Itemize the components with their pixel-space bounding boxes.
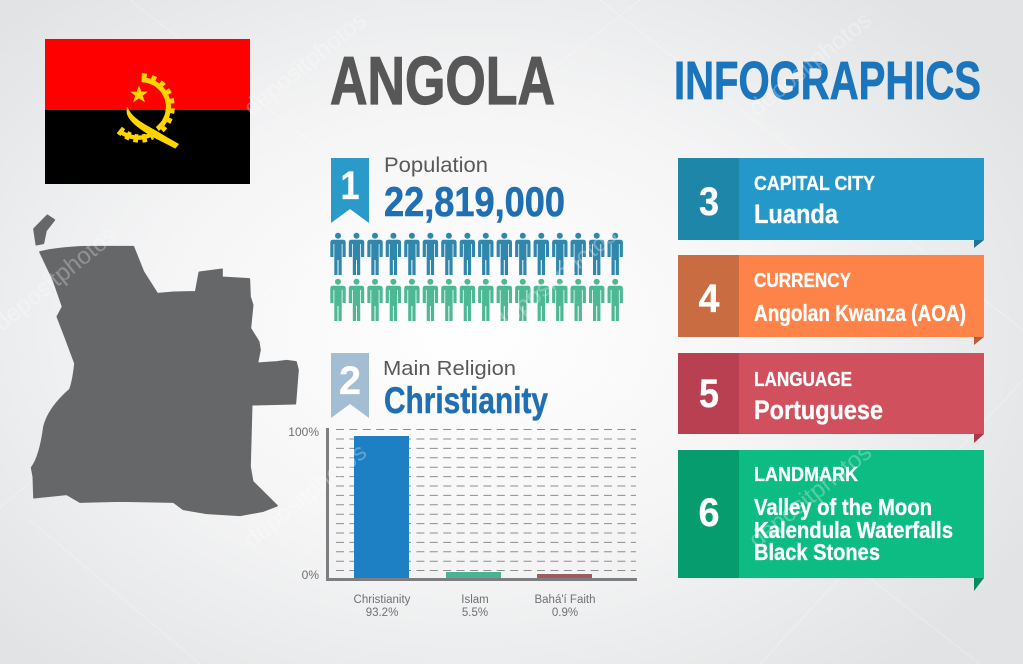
- axis label: 100%: 100%: [288, 425, 319, 439]
- ribbon badge 2: 2: [339, 359, 361, 403]
- watermark: depositphotos: [489, 222, 622, 337]
- panel: landmark: Black Stones: [754, 539, 880, 565]
- panel: landmark: Kalendula Waterfalls: [754, 517, 953, 543]
- bar chart: [288, 425, 637, 619]
- religion value: Christianity: [384, 380, 548, 421]
- label: Islam: 5.5%: [462, 607, 488, 619]
- panel: landmark: Valley of the Moon: [754, 494, 932, 520]
- people row: green: [330, 279, 623, 321]
- bar: Baha'i Faith: [537, 574, 592, 578]
- panel: landmark: [678, 450, 984, 591]
- ribbon badge 1: [331, 158, 369, 223]
- watermark: depositphotos: [239, 439, 372, 554]
- ribbon badge 2: [331, 353, 369, 418]
- label: Baha'i Faith: 0.9%: [552, 607, 578, 619]
- panel: language: [678, 353, 984, 443]
- panel: landmark: 6: [698, 491, 720, 535]
- watermark: [0, 7, 877, 554]
- panel: currency: [678, 255, 984, 345]
- panel: currency: Angolan Kwanza (AOA): [754, 300, 966, 326]
- panel: language: LANGUAGE: [754, 368, 852, 391]
- watermark: depositphotos: [744, 7, 877, 122]
- flag of Angola: [45, 39, 250, 184]
- icon: flag emblem: [119, 78, 179, 149]
- people row: blue: [330, 233, 623, 275]
- panel: currency: 4: [698, 277, 720, 321]
- watermark: depositphotos: [239, 7, 372, 122]
- bar: Islam: [446, 572, 501, 578]
- axis label: 0%: 0%: [302, 568, 319, 582]
- panel: capital city: [678, 158, 984, 248]
- label: Islam: Islam: [461, 594, 489, 606]
- panel: capital city: 3: [699, 180, 719, 224]
- panel: landmark: LANDMARK: [754, 463, 858, 486]
- title: Angola: ANGOLA: [330, 43, 555, 119]
- bar: Christianity: [354, 436, 409, 578]
- panel: language: 5: [699, 372, 719, 416]
- map of Angola: [32, 215, 298, 515]
- ribbon badge 1: 1: [340, 164, 360, 208]
- religion label: Main Religion: [383, 358, 516, 380]
- watermark: depositphotos: [744, 439, 877, 554]
- panel: religion: [331, 353, 548, 421]
- panel: population: [330, 154, 623, 321]
- panel: capital city: CAPITAL CITY: [754, 172, 875, 195]
- label: Baha'i Faith: Bahá'í Faith: [534, 594, 596, 606]
- population value: 22,819,000: [384, 178, 565, 225]
- population label: Population: [384, 154, 488, 177]
- label: Christianity: Christianity: [354, 594, 411, 606]
- panel: language: Portuguese: [754, 395, 883, 425]
- panel: capital city: Luanda: [754, 199, 839, 229]
- label: Christianity: 93.2%: [366, 607, 398, 619]
- panel: currency: CURRENCY: [754, 269, 851, 292]
